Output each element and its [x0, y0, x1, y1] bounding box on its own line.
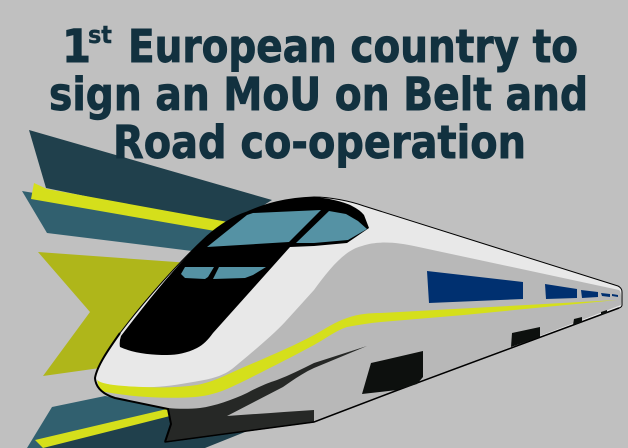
speed streak: dark lower: [43, 415, 250, 448]
dark skirt: [165, 346, 367, 442]
title: st: [88, 21, 112, 49]
underbody line: [165, 308, 619, 442]
title: [49, 20, 588, 169]
bogie block tiny: [601, 310, 607, 315]
train: [95, 197, 622, 442]
speed streak: olive arrow: [38, 252, 190, 376]
bogie block medium: [511, 327, 540, 347]
train body: [95, 197, 622, 442]
bogie block small: [573, 317, 582, 325]
speed streak: teal lower: [27, 396, 170, 448]
speed streak: yellow upper: [31, 183, 228, 231]
lower cab windows: [181, 267, 266, 279]
speed streak: yellow lower: [35, 409, 170, 448]
upper windshield panes: [207, 210, 367, 247]
side windows blue: [427, 271, 618, 303]
speed streak: dark upper: [29, 130, 272, 226]
title: 1: [62, 20, 91, 73]
lower body panel: [97, 243, 621, 441]
speed streak: teal upper: [22, 191, 232, 252]
windshield black mask: [120, 197, 369, 355]
title: Road co-operation: [113, 116, 526, 169]
yellow stripe: [97, 300, 617, 398]
front outline: [95, 333, 171, 442]
bogie block large: [362, 351, 423, 394]
